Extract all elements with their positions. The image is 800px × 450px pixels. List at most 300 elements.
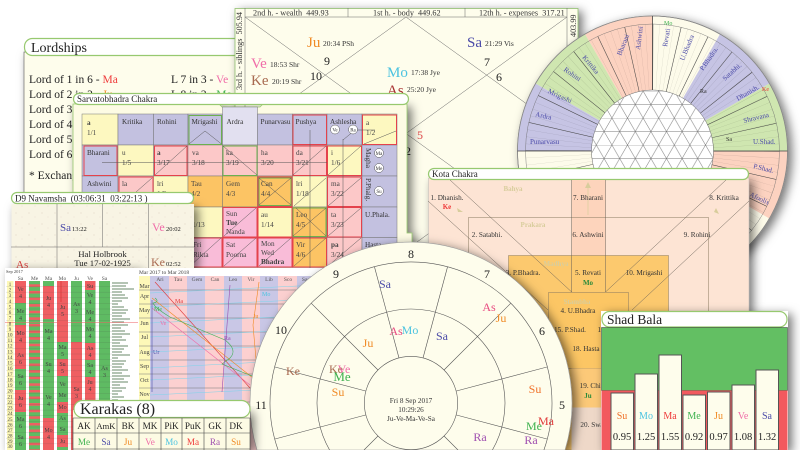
panel: Sarvatobhadra Chakra: Sarvatobhadra Chakra bbox=[77, 94, 157, 104]
column headers bbox=[18, 276, 108, 282]
panel: Dasha grid bbox=[5, 268, 139, 450]
planet positions: 20:19 Shr bbox=[272, 77, 302, 86]
nakshatra labels: Ke bbox=[762, 87, 769, 93]
month labels: Nov bbox=[139, 392, 150, 398]
house numbers: 11 bbox=[255, 398, 267, 412]
panel: D9 Navamsha: As bbox=[16, 259, 28, 271]
track labels: Ve bbox=[160, 321, 167, 327]
highlighted cell borders bbox=[84, 115, 396, 267]
cell labels: 3/20 bbox=[261, 159, 274, 167]
panel: Karakas: GK bbox=[208, 421, 222, 431]
cell labels: 4/3 bbox=[226, 190, 236, 198]
house numbers: 2 bbox=[405, 144, 411, 158]
lordship list: L 7 in 3 - Ve bbox=[171, 74, 228, 86]
dasha labels: 4 bbox=[88, 370, 92, 376]
dasha labels: 4 bbox=[88, 334, 92, 340]
dasha labels: Sa bbox=[87, 363, 93, 369]
dasha labels: Mo bbox=[44, 428, 53, 434]
row numbers: 14 bbox=[8, 356, 13, 361]
house numbers bbox=[310, 54, 502, 158]
cell labels: Rohini bbox=[157, 118, 177, 126]
nakshatra labels: 19. Chitra bbox=[580, 382, 609, 390]
planet positions: Ke bbox=[251, 73, 269, 89]
cell labels: va bbox=[192, 149, 200, 157]
track labels: Me bbox=[154, 307, 162, 313]
panel: Karakas: Mo bbox=[165, 437, 178, 447]
month labels: Jun bbox=[140, 321, 149, 327]
cell labels: Ardra bbox=[226, 118, 244, 126]
dasha labels: 4 bbox=[47, 435, 50, 441]
nakshatra labels: P.Shad. bbox=[753, 162, 775, 175]
nakshatra labels: P.Bhadra. bbox=[698, 45, 720, 72]
arrows bbox=[587, 186, 589, 215]
nakshatra labels: Sa bbox=[726, 137, 732, 143]
heading: D9 Navamsha bbox=[12, 192, 194, 204]
column headers: Ve bbox=[87, 276, 93, 282]
dasha labels: 4 bbox=[88, 300, 92, 306]
panel: Lordships bbox=[24, 38, 284, 272]
house numbers: 5 bbox=[417, 128, 423, 142]
panel: Sarvatobhadra Chakra: Me bbox=[376, 167, 383, 172]
nakshatra labels: Shravana bbox=[743, 111, 771, 125]
row numbers: 23 bbox=[8, 406, 13, 412]
month labels: Sep bbox=[140, 364, 149, 370]
dasha labels: Sa bbox=[60, 427, 66, 433]
row numbers: 17 bbox=[8, 373, 13, 378]
nakshatra labels: Afoolis bbox=[748, 191, 771, 207]
nakshatra labels: U.Bhadra bbox=[678, 33, 696, 62]
chart: nakshatra wheel bbox=[518, 16, 788, 286]
panel: Karakas: MK bbox=[143, 421, 158, 431]
sign headers: Sag bbox=[302, 277, 310, 283]
row numbers: 19 bbox=[8, 384, 13, 389]
planet labels: Ju bbox=[584, 392, 592, 400]
nakshatra labels: Rohini bbox=[562, 66, 582, 83]
planet labels: Ke bbox=[443, 203, 451, 211]
lordship list: Lord of 6 bbox=[29, 149, 73, 161]
panel: Karakas: Su bbox=[231, 437, 241, 447]
track labels: Ju bbox=[253, 314, 258, 320]
row numbers: 13 bbox=[8, 350, 13, 355]
panel: Karakas: PuK bbox=[185, 421, 202, 431]
planet labels: Ke bbox=[329, 362, 343, 376]
panel: Sarvatobhadra Chakra: Ma bbox=[376, 152, 383, 157]
house strength header: 1st h. - body 449.62 bbox=[373, 8, 441, 18]
nakshatra labels: 4. U.Bhadra bbox=[561, 307, 596, 315]
cell labels: Ashlesha bbox=[330, 118, 357, 126]
chart caption: Hal Holbrook bbox=[78, 249, 127, 259]
dasha labels: Ma bbox=[58, 345, 67, 351]
cell labels: Fri bbox=[193, 241, 201, 249]
planet positions: 18:53 Shr bbox=[270, 60, 300, 69]
strength histogram bbox=[112, 283, 134, 403]
dasha labels: 4 bbox=[47, 336, 50, 342]
dasha labels: As bbox=[87, 346, 94, 352]
house numbers: 10 bbox=[275, 323, 287, 337]
dasha labels: 3 bbox=[103, 373, 106, 379]
track labels: Ra bbox=[224, 336, 231, 342]
cell labels: 1/2 bbox=[366, 129, 376, 137]
dasha labels: Me bbox=[58, 393, 67, 399]
cell labels: 3/18 bbox=[192, 159, 205, 167]
sign headers: Tau bbox=[174, 277, 182, 283]
cell labels: Hasta bbox=[365, 241, 382, 249]
house numbers: 6 bbox=[496, 70, 502, 84]
month labels: Aug bbox=[139, 350, 150, 356]
dasha labels: 3 bbox=[75, 394, 78, 400]
cell labels: 3/21 bbox=[296, 159, 309, 167]
panel: Sarvatobhadra Chakra: Su bbox=[376, 190, 382, 195]
panel: Karakas: Ju bbox=[124, 437, 132, 447]
chart centre date bbox=[387, 397, 436, 423]
cell labels: 3/17 bbox=[157, 159, 170, 167]
nakshatra labels: 9. Rohini bbox=[684, 231, 710, 239]
cell labels: 1/5 bbox=[122, 159, 132, 167]
cell labels: Mrigashi bbox=[192, 118, 217, 126]
planet markers bbox=[330, 125, 384, 196]
panel: D9 Navamsha: 02:52 bbox=[166, 261, 181, 268]
dasha labels: Mo bbox=[58, 405, 67, 411]
track labels: Ur bbox=[153, 350, 159, 356]
dasha labels: Su bbox=[59, 362, 66, 368]
planet labels: As bbox=[482, 300, 496, 314]
chart: transit year graph: Mar 2017 to Mar 2018 bbox=[139, 270, 189, 276]
cell labels: 1/3 bbox=[157, 190, 167, 198]
inner triangular grid bbox=[592, 90, 714, 212]
panel: Kota Chakra: Kota Chakra bbox=[432, 169, 478, 179]
planet positions bbox=[251, 35, 514, 99]
nakshatra labels: 15. P.Shad. bbox=[554, 326, 586, 334]
lordship list bbox=[29, 74, 232, 182]
kota zone labels: Prakara bbox=[521, 221, 546, 229]
nakshatra labels: Ashwini bbox=[634, 26, 645, 50]
panel: Kota Chakra bbox=[428, 168, 749, 450]
dasha labels: Ma bbox=[44, 329, 53, 335]
coloured sign sectors bbox=[518, 16, 788, 218]
month labels: Mar bbox=[140, 284, 150, 290]
nakshatra labels: 11 bbox=[598, 326, 605, 334]
row numbers: 22 bbox=[8, 401, 13, 406]
dasha labels: 5 bbox=[61, 352, 64, 358]
heading: Kota Chakra bbox=[428, 168, 748, 180]
panel: Karakas: AmK bbox=[97, 421, 116, 431]
row numbers: 1 bbox=[9, 283, 12, 288]
dasha labels: 6 bbox=[19, 403, 22, 409]
bar values: 1.25 bbox=[637, 432, 655, 443]
kota zone labels: Madhya bbox=[544, 260, 569, 268]
dasha labels: 6 bbox=[19, 381, 22, 387]
row numbers: 11 bbox=[8, 339, 13, 344]
row numbers: 5 bbox=[9, 305, 12, 310]
house numbers: 8 bbox=[408, 247, 414, 261]
bar values: 1.32 bbox=[758, 432, 776, 443]
cell labels: P.Phalg. bbox=[364, 178, 372, 201]
dasha labels: As bbox=[59, 416, 66, 422]
panel: Karakas: BK bbox=[122, 421, 135, 431]
track labels: Mo bbox=[262, 292, 270, 298]
nakshatra labels: 8. Krittika bbox=[709, 194, 740, 202]
row numbers: 30 bbox=[8, 445, 13, 450]
planet labels: Su bbox=[529, 382, 541, 396]
dasha labels: 6 bbox=[19, 442, 22, 448]
nakshatra labels: U.Shad. bbox=[753, 138, 776, 146]
panel: Karakas: DK bbox=[229, 421, 243, 431]
house strength header: 403.99 bbox=[569, 14, 578, 37]
bars bbox=[611, 355, 778, 450]
planet labels: Ju bbox=[496, 311, 506, 325]
row numbers: 3 bbox=[9, 294, 12, 299]
nakshatra labels: Dhanish. bbox=[735, 83, 761, 103]
dasha labels: Ju bbox=[18, 396, 23, 402]
house numbers: 7 bbox=[484, 55, 490, 69]
cell labels: pa bbox=[331, 241, 339, 249]
nakshatra labels: 5. Revati bbox=[575, 269, 601, 277]
cell labels: Bhadra bbox=[261, 258, 285, 266]
panel: Karakas bbox=[73, 400, 250, 450]
dasha labels: Mo bbox=[16, 331, 25, 337]
dasha labels: 3 bbox=[75, 309, 78, 315]
house numbers: 5 bbox=[559, 398, 565, 412]
cell labels: a bbox=[87, 119, 91, 127]
kota zone labels: Stambha bbox=[564, 298, 591, 306]
column headers: Sa bbox=[102, 276, 108, 282]
nakshatra labels: 6. Ashwini bbox=[572, 231, 604, 239]
cell labels: i bbox=[331, 149, 333, 157]
nakshatra labels: 18. Hasta bbox=[572, 345, 600, 353]
panel: D9 Navamsha: Tue 17-02-1925 bbox=[74, 258, 131, 268]
kota zone labels: Bahya bbox=[503, 185, 523, 193]
lordship list: Lord of 1 in 6 - Ma bbox=[29, 74, 118, 86]
panel: Karakas: Me bbox=[78, 437, 90, 447]
cell labels: da bbox=[296, 149, 304, 157]
panel: Sarvatobhadra Chakra bbox=[73, 94, 412, 275]
row numbers: 2 bbox=[9, 289, 12, 294]
cell labels: 1/18 bbox=[296, 190, 309, 198]
chart centre date: Ju-Ve-Ma-Ve-Sa bbox=[387, 415, 436, 423]
bar values: 1.55 bbox=[661, 432, 679, 443]
dasha labels: 4 bbox=[19, 338, 22, 344]
sign headers: Vir bbox=[247, 277, 255, 283]
row numbers: 9 bbox=[9, 328, 12, 333]
panel: Shad Bala bbox=[601, 311, 788, 450]
chakra grid cells bbox=[82, 107, 397, 268]
track labels bbox=[153, 292, 270, 356]
cell labels: 3/22 bbox=[331, 190, 344, 198]
nakshatra labels bbox=[431, 194, 740, 429]
cell labels bbox=[87, 118, 390, 266]
cell labels: lri bbox=[157, 180, 163, 188]
dasha labels: 5 bbox=[61, 369, 64, 375]
dasha labels: 4 bbox=[88, 387, 92, 393]
dasha labels: 4 bbox=[88, 317, 92, 323]
row numbers: 15 bbox=[8, 362, 13, 366]
sign headers bbox=[156, 278, 308, 281]
concentric kota squares bbox=[468, 180, 708, 450]
panel: Sarvatobhadra Chakra: Ve bbox=[332, 128, 338, 134]
dasha labels: Su bbox=[45, 362, 52, 368]
kota zone labels bbox=[503, 185, 591, 306]
dasha labels: 4 bbox=[19, 294, 22, 300]
chart centre date: 10:29:26 bbox=[398, 406, 424, 414]
vedha lines bbox=[102, 130, 396, 268]
dasha labels: 4 bbox=[47, 303, 50, 309]
nakshatra labels: Mrigashi bbox=[547, 87, 573, 105]
planet labels: Mo bbox=[583, 279, 594, 287]
nakshatra labels: Satabhi. bbox=[721, 61, 743, 82]
dasha labels: 4 bbox=[88, 353, 92, 359]
panel: Dasha grid: Sep 2017 bbox=[6, 269, 24, 274]
planet labels: As bbox=[389, 324, 403, 338]
cell labels: 4/5 bbox=[296, 221, 306, 229]
row numbers: 29 bbox=[8, 440, 13, 445]
planet labels: Ju bbox=[363, 336, 373, 350]
cell labels: ma bbox=[331, 180, 341, 188]
lordship list: Lord of 2 in 2 - Ju bbox=[29, 89, 113, 101]
dasha labels: 6 bbox=[19, 360, 22, 366]
planet positions: 25:20 Jye bbox=[407, 85, 437, 94]
cell labels: 1/6 bbox=[331, 159, 341, 167]
panel: Karakas: Ra bbox=[210, 437, 220, 447]
house numbers: 10 bbox=[310, 69, 322, 83]
nakshatra labels bbox=[530, 21, 776, 207]
cell labels: 3/19 bbox=[226, 159, 239, 167]
bar values: 0.97 bbox=[709, 432, 728, 443]
row numbers: 21 bbox=[8, 395, 13, 400]
nakshatra labels: 20. Swati bbox=[580, 421, 608, 429]
planet labels: Me bbox=[333, 369, 351, 384]
cell labels: 1/13 bbox=[192, 221, 205, 229]
lordship list: Lord of 3 bbox=[29, 104, 73, 116]
dasha labels: Ju bbox=[60, 305, 65, 311]
dasha labels: Ve bbox=[45, 395, 52, 401]
planet positions: 20:34 PSh bbox=[323, 39, 354, 48]
planet positions: Sa bbox=[467, 35, 482, 51]
planet labels: Ma bbox=[663, 411, 677, 422]
nakshatra labels: 1. Dhanish. bbox=[431, 194, 464, 202]
cell labels: Bharani bbox=[87, 149, 110, 157]
dasha labels: Ve bbox=[59, 382, 66, 388]
cell labels: Nanda bbox=[226, 228, 246, 236]
cell labels: Can bbox=[261, 180, 273, 188]
bar chart background bbox=[602, 328, 788, 390]
dasha labels: Ju bbox=[87, 380, 93, 386]
dasha labels bbox=[16, 284, 108, 448]
column headers: Ma bbox=[45, 276, 53, 282]
cell labels: Sun bbox=[226, 210, 238, 218]
cell labels: 3/24 bbox=[331, 251, 344, 259]
cell labels: au bbox=[261, 211, 268, 219]
dasha labels: Sa bbox=[18, 435, 24, 441]
dasha labels: Ju bbox=[60, 439, 65, 445]
nakshatra labels: 10. Mrigashi bbox=[626, 269, 662, 277]
nakshatra labels: 3. P.Bhadra. bbox=[506, 269, 541, 277]
panel: Karakas: PiK bbox=[164, 421, 179, 431]
panel: Sarvatobhadra Chakra: Ra bbox=[350, 128, 357, 134]
house numbers bbox=[255, 247, 565, 412]
panel: North Indian chart bbox=[235, 8, 578, 308]
panel: Karakas: Ve bbox=[145, 437, 155, 447]
cell labels: Gem bbox=[226, 180, 240, 188]
cell labels: Mon bbox=[261, 240, 275, 248]
panel: Lordships: Lordships bbox=[31, 41, 87, 56]
bar values: 0.95 bbox=[613, 432, 631, 443]
bar values: 0.92 bbox=[685, 432, 703, 443]
sign headers: Lib bbox=[265, 277, 273, 283]
planet labels: Ma bbox=[538, 414, 555, 428]
row numbers bbox=[8, 283, 13, 450]
track labels: Ma bbox=[175, 299, 183, 305]
cell labels: a bbox=[157, 149, 161, 157]
row numbers: 4 bbox=[9, 300, 12, 305]
nakshatra labels: Punarvasu bbox=[530, 138, 560, 146]
dasha labels: 4 bbox=[19, 316, 22, 322]
grid rows bbox=[6, 287, 112, 444]
house numbers: 9 bbox=[324, 54, 330, 68]
planet labels: Sa bbox=[379, 277, 392, 291]
planet labels bbox=[286, 277, 555, 447]
panel: Karakas: Ma bbox=[187, 437, 199, 447]
planet labels: Me bbox=[526, 419, 542, 433]
row numbers: 16 bbox=[8, 367, 13, 372]
house spokes bbox=[275, 267, 547, 450]
planet positions: Ve bbox=[251, 56, 267, 72]
sign headers: Can bbox=[211, 277, 220, 283]
planet labels: Ve bbox=[738, 411, 749, 422]
dasha labels: As bbox=[73, 302, 80, 308]
dasha labels: Ve bbox=[17, 287, 24, 293]
dasha labels: Ju bbox=[46, 296, 51, 302]
sign headers: Gem bbox=[192, 277, 203, 283]
dasha labels: Me bbox=[16, 309, 25, 315]
row numbers: 12 bbox=[8, 345, 13, 350]
nakshatra labels: Revati bbox=[661, 28, 672, 47]
panel: D9 Navamsha: Ve bbox=[152, 220, 165, 234]
sign bands bbox=[139, 276, 150, 400]
sign headers: Sco bbox=[284, 277, 292, 283]
planet labels: Su bbox=[332, 385, 344, 399]
chart diagonals bbox=[245, 8, 567, 300]
cell labels: 4/2 bbox=[191, 190, 201, 198]
dasha labels: 6 bbox=[19, 424, 22, 430]
planet labels: Sa bbox=[436, 329, 449, 343]
nakshatra labels: 2. Satabhi. bbox=[472, 231, 502, 239]
dasha labels: 4 bbox=[47, 369, 50, 375]
dasha labels: Mo bbox=[86, 327, 94, 333]
row numbers: 27 bbox=[8, 429, 13, 434]
planet labels: Mo bbox=[639, 411, 653, 422]
planet labels: Ju bbox=[714, 411, 723, 422]
lordship list: * Exchange bbox=[29, 170, 83, 182]
cell labels: 3/23 bbox=[331, 221, 344, 229]
nakshatra labels: Ardra bbox=[535, 110, 553, 122]
column headers: Mo bbox=[59, 276, 67, 282]
lordship list: Lord of 4 bbox=[29, 119, 73, 131]
sign headers: Leo bbox=[229, 277, 238, 283]
house strength header: 12th h. - expenses 317.21 bbox=[479, 8, 565, 18]
row numbers: 20 bbox=[8, 390, 13, 395]
karaka table bbox=[73, 418, 250, 450]
cell labels: Tue bbox=[226, 219, 237, 227]
row numbers: 25 bbox=[8, 418, 13, 423]
cell labels: Wed bbox=[261, 249, 274, 257]
dasha labels: As bbox=[17, 353, 24, 359]
planet labels bbox=[443, 203, 594, 400]
planet tracks bbox=[152, 282, 259, 392]
nakshatra labels: Bharani bbox=[615, 33, 631, 57]
chart: transit year graph bbox=[139, 268, 322, 450]
heading: Karakas (8) bbox=[74, 400, 250, 418]
nakshatra labels: Mo bbox=[664, 21, 672, 27]
